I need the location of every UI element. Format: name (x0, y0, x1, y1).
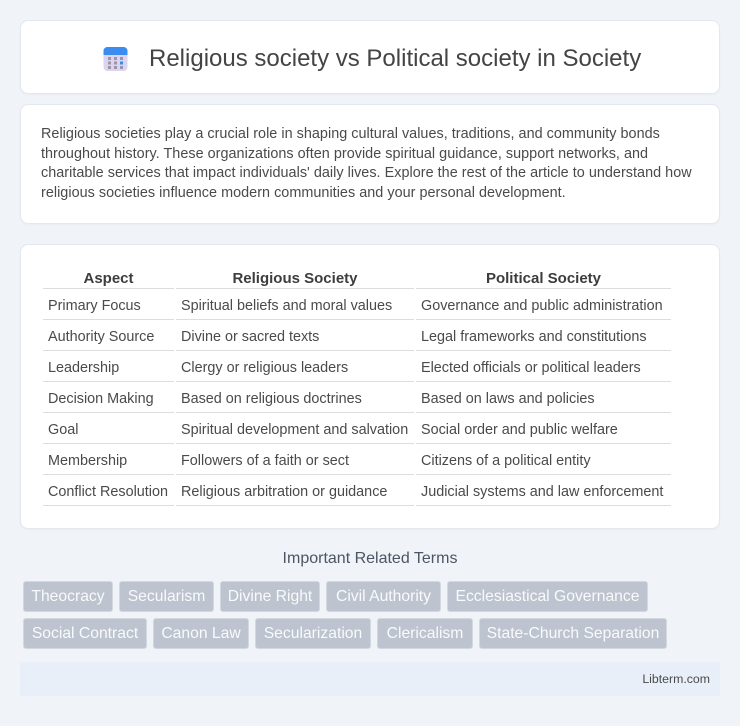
table row: goal: Social order and public welfare (421, 422, 618, 438)
table row: primary focus (48, 298, 663, 314)
panel: introduction (20, 104, 720, 224)
tag: Canon Law (161, 625, 241, 642)
table row: goal: Spiritual development and salvation (181, 422, 408, 438)
table row: membership (48, 453, 591, 469)
table row: conflict resolution: Religious arbitration or guidance (181, 484, 387, 500)
table header row: Aspect (83, 270, 134, 287)
heading: related terms: Important Related Terms (283, 550, 457, 567)
table row: goal: Goal (48, 422, 78, 438)
table row: leadership: Leadership (48, 360, 119, 376)
tag group: related terms (23, 581, 667, 649)
tag: Civil Authority (336, 588, 431, 605)
tag: Ecclesiastical Governance (456, 588, 639, 605)
panel: header (20, 20, 720, 94)
table row: primary focus: Governance and public administration (421, 298, 663, 314)
table row: leadership (48, 360, 641, 376)
table row: authority source: Divine or sacred texts (181, 329, 319, 345)
table row: authority source (48, 329, 647, 345)
table header row: Religious Society (232, 270, 358, 287)
tag: Secularization (264, 625, 362, 642)
text block: introduction: Religious societies play a crucial role in shaping cultural values, traditions, and community bonds (41, 126, 660, 142)
text block: introduction: religious societies influence modern communities and your personal development. (41, 184, 566, 200)
table row: decision making: Decision Making (48, 391, 154, 407)
tag (23, 581, 113, 612)
tag (447, 581, 648, 612)
tag (153, 618, 249, 649)
table row: conflict resolution: Judicial systems and law enforcement (421, 484, 663, 500)
table row: decision making: Based on laws and policies (421, 391, 595, 407)
tag: State-Church Separation (487, 625, 659, 642)
table row: membership: Followers of a faith or sect (181, 453, 349, 469)
table row: primary focus: Spiritual beliefs and moral values (181, 298, 392, 314)
table row: decision making (48, 391, 595, 407)
table row: conflict resolution (48, 484, 664, 500)
tag: Secularism (128, 588, 205, 605)
tag (479, 618, 667, 649)
panel: comparison table (20, 244, 720, 529)
table header row: Political Society (486, 270, 601, 287)
table row: membership: Membership (48, 453, 127, 469)
icon: calendar (104, 47, 128, 71)
footer source: Libterm.com (642, 672, 710, 686)
title: Religious society vs Political society in Society (149, 45, 641, 72)
table header row (83, 270, 601, 287)
table row: leadership: Clergy or religious leaders (181, 360, 348, 376)
tag: Theocracy (31, 588, 105, 605)
table row: goal (48, 422, 618, 438)
text block: introduction (41, 126, 692, 200)
table row: authority source: Authority Source (48, 329, 154, 345)
table row: membership: Citizens of a political entity (421, 453, 591, 469)
tag (326, 581, 441, 612)
tag (220, 581, 320, 612)
table row: primary focus: Primary Focus (48, 298, 141, 314)
tag: Clericalism (387, 625, 463, 642)
text block: introduction: charitable services that impact individuals' daily lives. Explore the rest of the article to understand how (41, 165, 692, 181)
table row: decision making: Based on religious doctrines (181, 391, 362, 407)
tag (255, 618, 371, 649)
footer bar (20, 662, 720, 696)
table row: authority source: Legal frameworks and constitutions (421, 329, 647, 345)
tag (23, 618, 147, 649)
text block: introduction: throughout history. These organizations often provide spiritual guidance, support networks, and (41, 146, 648, 162)
tag: Divine Right (228, 588, 312, 605)
table row: conflict resolution: Conflict Resolution (48, 484, 168, 500)
table row: leadership: Elected officials or political leaders (421, 360, 641, 376)
tag: Social Contract (32, 625, 138, 642)
tag (119, 581, 214, 612)
tag (377, 618, 473, 649)
